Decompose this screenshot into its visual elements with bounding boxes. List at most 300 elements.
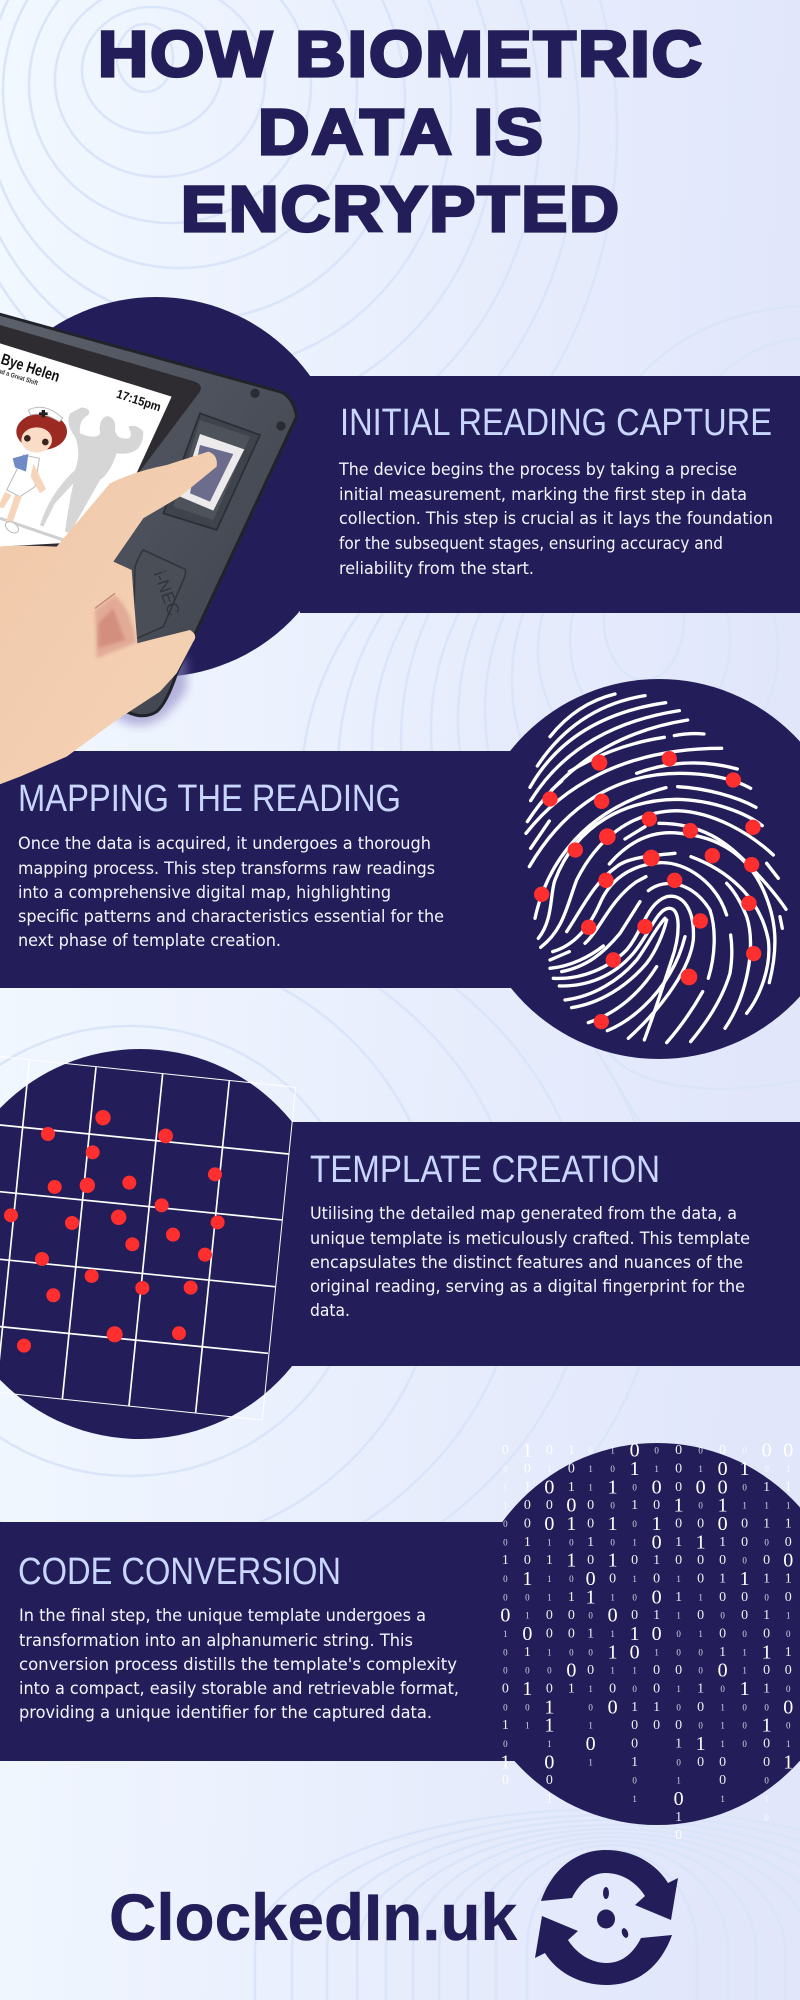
icon: binary code matrix: 0 (786, 1721, 791, 1731)
icon: binary code matrix: 0 (544, 1476, 554, 1498)
icon: binary code matrix: 0 (544, 1751, 554, 1773)
icon: binary code matrix: 0 (653, 1718, 660, 1733)
icon: binary code matrix: 0 (653, 1571, 660, 1586)
icon: binary code matrix: 0 (546, 1773, 553, 1788)
icon: binary code matrix: 0 (764, 1702, 769, 1712)
icon: binary code matrix: 0 (632, 1519, 637, 1529)
icon: binary code matrix: 0 (720, 1611, 725, 1621)
icon: binary code matrix: 0 (741, 1608, 748, 1623)
icon: binary code matrix: 1 (502, 1718, 509, 1733)
icon: binary code matrix: 0 (652, 1623, 662, 1645)
icon: binary code matrix: 0 (675, 1516, 682, 1531)
icon: binary code matrix: 0 (698, 1647, 703, 1657)
icon: binary code matrix: 0 (785, 1663, 792, 1678)
icon: binary code matrix: 1 (764, 1501, 769, 1511)
icon: binary code matrix: 0 (764, 1776, 769, 1786)
text block: initial reading: reliability from the start. (339, 559, 534, 578)
icon: binary code matrix: 1 (588, 1721, 593, 1731)
icon: binary code matrix: 1 (786, 1464, 791, 1474)
icon: binary code matrix: 1 (524, 1535, 531, 1550)
icon: binary code matrix: 1 (568, 1480, 575, 1495)
icon: binary code matrix: 1 (742, 1666, 747, 1676)
icon: binary code matrix: 0 (783, 1696, 793, 1718)
icon: binary code matrix: 0 (786, 1629, 791, 1639)
icon: binary code matrix: 0 (568, 1626, 575, 1641)
icon: binary code matrix: 0 (587, 1553, 594, 1568)
icon: binary code matrix: 1 (653, 1553, 660, 1568)
icon: refresh arrows logo (535, 1850, 678, 1985)
icon: binary code matrix: 1 (608, 1550, 618, 1572)
icon: binary code matrix: 0 (741, 1535, 748, 1550)
icon: binary code matrix: 1 (522, 1568, 532, 1590)
icon: binary code matrix: 0 (718, 1476, 728, 1498)
text block: code conversion: into a compact, easily storable and retrievable format, (19, 1679, 459, 1698)
icon: binary code matrix (500, 1440, 793, 1843)
text block: initial reading: The device begins the process by taking a precise (338, 460, 737, 479)
icon: binary code matrix: 0 (783, 1550, 793, 1572)
icon: binary code matrix: 0 (718, 1660, 728, 1682)
icon: binary code matrix: 0 (763, 1663, 770, 1678)
icon: binary code matrix: 1 (587, 1535, 594, 1550)
icon: binary code matrix: 1 (653, 1700, 660, 1715)
icon: binary code matrix: 1 (696, 1531, 706, 1553)
icon: binary code matrix: 1 (785, 1480, 792, 1495)
icon: binary code matrix: 1 (546, 1791, 553, 1806)
icon: binary code matrix: 0 (566, 1660, 576, 1682)
logo: ClockedIn.uk wordmark: ClockedIn.uk (109, 1880, 517, 1954)
icon: binary code matrix: 0 (785, 1590, 792, 1605)
icon: binary code matrix: 1 (785, 1571, 792, 1586)
icon: binary code matrix: 0 (742, 1702, 747, 1712)
icon: binary code matrix: 1 (608, 1476, 618, 1498)
icon: binary code matrix: 1 (547, 1592, 552, 1602)
icon: binary code matrix: 1 (631, 1498, 638, 1513)
icon: binary code matrix: 0 (525, 1666, 530, 1676)
heading: mapping the reading: MAPPING THE READING (18, 778, 401, 820)
icon: binary code matrix: 0 (503, 1647, 508, 1657)
icon: binary code matrix: 0 (719, 1626, 726, 1641)
icon: binary code matrix: 0 (675, 1553, 682, 1568)
icon: binary code matrix: 0 (503, 1519, 508, 1529)
icon: binary code matrix: 0 (569, 1574, 574, 1584)
icon: binary code matrix: 1 (675, 1810, 682, 1825)
icon: binary code matrix: 1 (630, 1623, 640, 1645)
icon: binary code matrix: 1 (631, 1700, 638, 1715)
icon: binary code matrix: 1 (675, 1535, 682, 1550)
icon: binary code matrix: 1 (718, 1495, 728, 1517)
icon: binary code matrix: 0 (742, 1446, 747, 1456)
icon: binary code matrix: 1 (763, 1516, 770, 1531)
icon: binary code matrix: 0 (654, 1446, 659, 1456)
icon: binary code matrix: 0 (719, 1553, 726, 1568)
icon: binary code matrix: 1 (547, 1464, 552, 1474)
icon: binary code matrix: 0 (632, 1776, 637, 1786)
icon: binary code matrix: 1 (676, 1574, 681, 1584)
icon: binary code matrix: 1 (546, 1553, 553, 1568)
icon: binary code matrix: 0 (763, 1553, 770, 1568)
icon: binary code matrix: 1 (547, 1574, 552, 1584)
text block: initial reading: collection. This step is crucial as it lays the foundation (339, 509, 773, 528)
icon: binary code matrix: 0 (588, 1611, 593, 1621)
text block: mapping: next phase of template creation. (18, 931, 281, 950)
text block: code conversion: conversion process distills the template's complexity (19, 1655, 457, 1674)
icon: binary code matrix: 1 (525, 1721, 530, 1731)
text block: mapping: into a comprehensive digital map, highlighting (18, 883, 391, 902)
icon: binary code matrix: 0 (608, 1696, 618, 1718)
icon: binary code matrix: 0 (502, 1681, 509, 1696)
icon: binary code matrix: 1 (676, 1684, 681, 1694)
icon: binary code matrix: 1 (654, 1647, 659, 1657)
text block: mapping: specific patterns and characteristics essential for the (18, 907, 444, 926)
icon: binary code matrix: 0 (719, 1773, 726, 1788)
icon: binary code matrix: 1 (610, 1666, 615, 1676)
icon: binary code matrix: 0 (630, 1440, 640, 1462)
icon: binary code matrix: 0 (503, 1592, 508, 1602)
text block: initial reading: initial measurement, marking the first step in data (339, 485, 747, 504)
icon: binary code matrix: 1 (763, 1480, 770, 1495)
title: HOW BIOMETRIC (98, 18, 704, 90)
icon: binary code matrix: 0 (697, 1553, 704, 1568)
illustration: hand on fingerprint tablet (0, 313, 297, 785)
icon: binary code matrix: 0 (569, 1647, 574, 1657)
icon: binary code matrix: 0 (631, 1736, 638, 1751)
icon: binary code matrix: 1 (544, 1696, 554, 1718)
icon: binary code matrix: 1 (608, 1641, 618, 1663)
icon: binary code matrix: 1 (654, 1464, 659, 1474)
screen artwork (0, 407, 143, 540)
icon: binary code matrix: 1 (525, 1611, 530, 1621)
icon: binary code matrix: 1 (610, 1446, 615, 1456)
icon: binary code matrix: 1 (608, 1513, 618, 1535)
icon: binary code matrix: 1 (632, 1794, 637, 1804)
icon: binary code matrix: 0 (764, 1812, 769, 1822)
icon: binary code matrix: 1 (522, 1678, 532, 1700)
panel: initial reading capture (0, 297, 800, 785)
icon: binary code matrix: 1 (568, 1681, 575, 1696)
icon: binary code matrix: 0 (566, 1495, 576, 1517)
icon: binary code matrix: 0 (652, 1476, 662, 1498)
icon: binary code matrix: 0 (762, 1440, 772, 1462)
icon: binary code matrix: 1 (586, 1586, 596, 1608)
text block: template: encapsulates the distinct features and nuances of the (310, 1253, 743, 1272)
icon: binary code matrix: 0 (763, 1755, 770, 1770)
icon: binary code matrix: 0 (785, 1535, 792, 1550)
icon: binary code matrix: 1 (503, 1482, 508, 1492)
icon: binary code matrix: 0 (546, 1681, 553, 1696)
icon: binary code matrix: 0 (696, 1476, 706, 1498)
icon: binary code matrix: 1 (785, 1645, 792, 1660)
icon: binary code matrix: 0 (698, 1721, 703, 1731)
icon: binary code matrix: 0 (719, 1755, 726, 1770)
icon: binary code matrix: 0 (697, 1608, 704, 1623)
icon: binary code matrix: 0 (503, 1464, 508, 1474)
icon: binary code matrix: 1 (740, 1568, 750, 1590)
icon: binary code matrix: 1 (674, 1495, 684, 1517)
icon: binary code matrix: 0 (676, 1629, 681, 1639)
icon: binary code matrix: 0 (588, 1647, 593, 1657)
illustration: hand on fingerprint tablet: i-NEC (150, 568, 184, 618)
icon: binary code matrix: 0 (783, 1440, 793, 1462)
icon: binary code matrix: 1 (720, 1794, 725, 1804)
icon: binary code matrix: 0 (608, 1605, 618, 1627)
icon: binary code matrix: 0 (546, 1626, 553, 1641)
icon: binary code matrix: 0 (719, 1590, 726, 1605)
icon: binary code matrix: 1 (764, 1794, 769, 1804)
icon: binary code matrix: 0 (718, 1458, 728, 1480)
icon: binary code matrix: 0 (675, 1828, 682, 1843)
icon: binary code matrix: 0 (587, 1498, 594, 1513)
icon: binary code matrix: 1 (676, 1776, 681, 1786)
icon: binary code matrix: 1 (547, 1739, 552, 1749)
icon: binary code matrix: 0 (786, 1684, 791, 1694)
icon: binary code matrix: 0 (742, 1629, 747, 1639)
icon: binary code matrix: 0 (502, 1773, 509, 1788)
icon: binary code matrix: 0 (588, 1702, 593, 1712)
icon: binary code matrix: 0 (610, 1537, 615, 1547)
icon: binary code matrix: 0 (544, 1513, 554, 1535)
illustration: hand on fingerprint tablet: Bye Helen (0, 351, 62, 386)
icon: binary code matrix: 0 (609, 1681, 616, 1696)
icon: binary code matrix: 1 (522, 1440, 532, 1462)
text block: code conversion: providing a unique identifier for the captured data. (19, 1703, 432, 1722)
icon: binary code matrix: 0 (653, 1663, 660, 1678)
icon: binary code matrix: 0 (524, 1498, 531, 1513)
icon: binary code matrix: 0 (546, 1443, 553, 1458)
icon: binary code matrix: 0 (675, 1663, 682, 1678)
text block: mapping (18, 834, 444, 950)
icon: binary code matrix: 0 (610, 1501, 615, 1511)
icon: binary code matrix: 1 (631, 1755, 638, 1770)
icon: binary code matrix: 1 (763, 1571, 770, 1586)
icon: binary code matrix: 1 (763, 1681, 770, 1696)
icon: binary code matrix: 1 (762, 1715, 772, 1737)
icon: binary code matrix: 1 (502, 1553, 509, 1568)
icon: binary code matrix: 0 (763, 1626, 770, 1641)
icon: binary code matrix: 1 (588, 1482, 593, 1492)
icon: binary code matrix: 0 (675, 1480, 682, 1495)
icon: binary code matrix: 0 (675, 1443, 682, 1458)
icon: binary code matrix: 1 (500, 1751, 510, 1773)
icon: binary code matrix: 0 (630, 1641, 640, 1663)
text block: template (310, 1204, 750, 1320)
icon: binary code matrix: 1 (588, 1684, 593, 1694)
title: ENCRYPTED (181, 173, 621, 245)
icon: binary code matrix: 1 (547, 1537, 552, 1547)
text block: code conversion: In the final step, the unique template undergoes a (19, 1606, 426, 1625)
icon: binary code matrix: 0 (609, 1571, 616, 1586)
icon: binary code matrix: 1 (763, 1608, 770, 1623)
icon: binary code matrix: 1 (698, 1592, 703, 1602)
icon: binary code matrix: 1 (544, 1715, 554, 1737)
icon: binary code matrix: 1 (675, 1736, 682, 1751)
illustration: hand on fingerprint tablet: 17:15pm (115, 387, 163, 414)
icon: binary code matrix: 0 (697, 1571, 704, 1586)
icon: fingerprint with red points (526, 694, 786, 1043)
icon: binary code matrix: 0 (525, 1592, 530, 1602)
icon: binary code matrix: 1 (786, 1739, 791, 1749)
icon: binary code matrix: 0 (568, 1461, 575, 1476)
icon: binary code matrix: 0 (632, 1592, 637, 1602)
icon: binary code matrix: 1 (720, 1739, 725, 1749)
icon: binary code matrix: 0 (676, 1702, 681, 1712)
icon: binary code matrix: 0 (632, 1684, 637, 1694)
icon: binary code matrix: 0 (546, 1608, 553, 1623)
icon: binary code matrix: 0 (524, 1553, 531, 1568)
icon: binary code matrix: 0 (675, 1718, 682, 1733)
icon: binary code matrix: 0 (547, 1666, 552, 1676)
icon: binary code matrix: 1 (675, 1590, 682, 1605)
title: DATA IS (258, 96, 545, 168)
text block: code conversion: transformation into an alphanumeric string. This (19, 1631, 413, 1650)
icon: binary code matrix: 0 (742, 1556, 747, 1566)
icon: binary code matrix: 1 (676, 1611, 681, 1621)
text block: initial reading (338, 460, 773, 578)
icon: binary code matrix: 0 (631, 1553, 638, 1568)
icon: binary code matrix: 1 (696, 1733, 706, 1755)
icon: binary code matrix: 0 (697, 1700, 704, 1715)
icon: binary code matrix: 0 (652, 1531, 662, 1553)
icon: binary code matrix: 1 (524, 1645, 531, 1660)
icon: binary code matrix: 1 (719, 1535, 726, 1550)
icon: binary code matrix: 1 (742, 1647, 747, 1657)
icon: binary code matrix: 1 (568, 1443, 575, 1458)
icon: binary code matrix: 0 (741, 1516, 748, 1531)
icon: binary code matrix: 0 (587, 1663, 594, 1678)
icon: binary code matrix: 0 (525, 1702, 530, 1712)
icon: binary code matrix: 0 (719, 1443, 726, 1458)
text block: mapping: Once the data is acquired, it undergoes a thorough (18, 834, 431, 853)
icon: binary code matrix: 0 (586, 1733, 596, 1755)
icon: binary code matrix: 0 (631, 1608, 638, 1623)
icon: binary code matrix: 0 (568, 1608, 575, 1623)
icon: binary code matrix: 1 (632, 1537, 637, 1547)
icon: binary code matrix: 0 (652, 1586, 662, 1608)
text block: code conversion (19, 1606, 459, 1722)
icon: binary code matrix: 1 (785, 1516, 792, 1531)
text block: template: original reading, serving as a digital fingerprint for the (310, 1277, 745, 1296)
icon: binary code matrix: 0 (586, 1568, 596, 1590)
icon: binary code matrix: 0 (503, 1739, 508, 1749)
icon: binary code matrix: 0 (631, 1718, 638, 1733)
icon: binary code matrix: 0 (741, 1590, 748, 1605)
icon: binary code matrix: 1 (720, 1702, 725, 1712)
icon: binary code matrix: 0 (524, 1516, 531, 1531)
panel: code conversion (0, 1440, 800, 1843)
text block: template: unique template is meticulously crafted. This template (310, 1229, 750, 1248)
icon: binary code matrix: 0 (503, 1702, 508, 1712)
icon: binary code matrix: 0 (698, 1446, 703, 1456)
icon: binary code matrix: 0 (569, 1537, 574, 1547)
icon: binary code matrix: 0 (718, 1513, 728, 1535)
icon: binary code matrix: 0 (632, 1482, 637, 1492)
icon: binary code matrix: 1 (503, 1629, 508, 1639)
heading: code conversion: CODE CONVERSION (18, 1551, 341, 1593)
icon: binary code matrix: 1 (719, 1571, 726, 1586)
icon: binary code matrix: 1 (742, 1501, 747, 1511)
icon: binary code matrix: 1 (719, 1645, 726, 1660)
icon: binary code matrix: 0 (698, 1666, 703, 1676)
icon: binary code matrix: 1 (610, 1629, 615, 1639)
fingerprint sensor (163, 413, 260, 530)
icon: binary code matrix: 0 (524, 1461, 531, 1476)
panel: template creation (0, 1049, 800, 1439)
icon: binary code matrix: 0 (588, 1446, 593, 1456)
icon: binary code matrix: 0 (764, 1592, 769, 1602)
icon: binary code matrix: 0 (503, 1537, 508, 1547)
icon: binary code matrix: 0 (764, 1464, 769, 1474)
icon: binary code matrix: 1 (786, 1501, 791, 1511)
text block: template: Utilising the detailed map generated from the data, a (310, 1204, 737, 1223)
icon: binary code matrix: 1 (653, 1608, 660, 1623)
icon: binary code matrix: 0 (697, 1516, 704, 1531)
icon: binary code matrix: 0 (653, 1681, 660, 1696)
icon: binary code matrix: 1 (503, 1501, 508, 1511)
icon: binary code matrix: 1 (762, 1641, 772, 1663)
icon: binary code matrix: 1 (786, 1611, 791, 1621)
text block: initial reading: for the subsequent stages, ensuring accuracy and (339, 534, 723, 553)
chart: template grid with red points (0, 1057, 296, 1420)
icon: binary code matrix: 1 (524, 1480, 531, 1495)
hand (0, 452, 217, 785)
icon: binary code matrix: 1 (652, 1513, 662, 1535)
icon: binary code matrix: 1 (587, 1626, 594, 1641)
icon: binary code matrix: 1 (588, 1464, 593, 1474)
icon: binary code matrix: 0 (742, 1721, 747, 1731)
icon: binary code matrix: 0 (502, 1443, 509, 1458)
icon: binary code matrix: 1 (720, 1721, 725, 1731)
icon: binary code matrix: 0 (503, 1666, 508, 1676)
icon: binary code matrix: 0 (522, 1623, 532, 1645)
icon: binary code matrix: 1 (632, 1666, 637, 1676)
icon: binary code matrix: 0 (675, 1461, 682, 1476)
icon: binary code matrix: 1 (566, 1513, 576, 1535)
panel: mapping the reading (0, 679, 800, 1059)
icon: binary code matrix: 1 (610, 1592, 615, 1602)
icon: binary code matrix: 1 (547, 1647, 552, 1657)
icon: binary code matrix: 1 (630, 1458, 640, 1480)
icon: binary code matrix: 0 (503, 1574, 508, 1584)
icon: binary code matrix: 1 (698, 1629, 703, 1639)
icon: binary code matrix: 0 (742, 1482, 747, 1492)
icon: binary code matrix: 1 (698, 1464, 703, 1474)
icon: binary code matrix: 0 (610, 1464, 615, 1474)
icon: binary code matrix: 0 (697, 1755, 704, 1770)
icon: binary code matrix: 0 (500, 1605, 510, 1627)
icon: binary code matrix: 0 (676, 1757, 681, 1767)
icon: binary code matrix: 1 (783, 1751, 793, 1773)
icon: binary code matrix: 1 (740, 1678, 750, 1700)
icon: binary code matrix: 1 (740, 1458, 750, 1480)
title (98, 18, 704, 245)
icon: binary code matrix: 0 (698, 1501, 703, 1511)
icon: binary code matrix: 0 (653, 1498, 660, 1513)
icon: binary code matrix: 0 (720, 1684, 725, 1694)
icon: binary code matrix: 1 (566, 1550, 576, 1572)
text block: template: data. (310, 1301, 350, 1320)
icon: binary code matrix: 1 (588, 1757, 593, 1767)
icon: binary code matrix: 1 (697, 1681, 704, 1696)
icon: binary code matrix: 1 (568, 1590, 575, 1605)
icon: binary code matrix: 0 (674, 1788, 684, 1810)
icon: binary code matrix: 0 (587, 1516, 594, 1531)
icon: binary code matrix: 0 (742, 1739, 747, 1749)
icon: binary code matrix: 0 (676, 1647, 681, 1657)
icon: binary code matrix: 0 (546, 1498, 553, 1513)
text block: mapping: mapping process. This step transforms raw readings (18, 859, 435, 878)
heading: template creation: TEMPLATE CREATION (310, 1149, 660, 1191)
icon: binary code matrix: 0 (763, 1736, 770, 1751)
icon: binary code matrix: 0 (764, 1537, 769, 1547)
